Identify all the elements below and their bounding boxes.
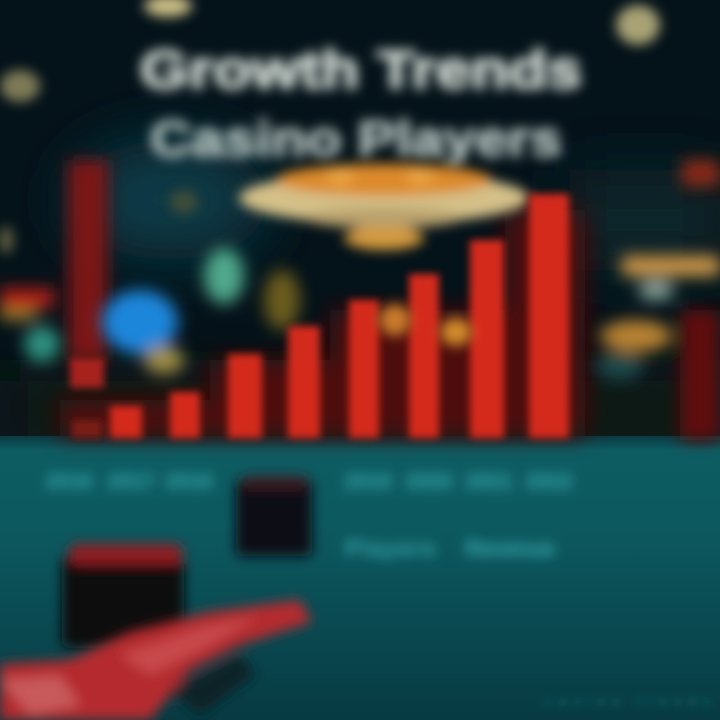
background lights [0,0,660,254]
dark dice [236,476,312,556]
dark backdrop glow [0,140,720,440]
glow between bars [379,304,472,346]
left decorative items [0,248,300,374]
axis labels: Revenue [465,536,555,561]
left tall dark red column [68,160,108,360]
right side decorations [596,160,720,440]
red cards [0,600,312,720]
footer watermark: casino trends [545,693,710,710]
axis labels: 2016 [46,471,92,493]
axis labels: 2022 [526,471,572,493]
axis labels: 2019 [345,471,391,493]
axis labels: 2017 [108,471,154,493]
axis labels: 2018 [166,471,212,493]
axis labels [46,471,572,561]
chandelier [239,164,529,250]
table surface [0,436,720,720]
title: Casino Players [150,111,562,167]
dark red shading behind bars [60,210,585,436]
stack of chips [62,544,184,648]
axis labels: 2020 [406,471,452,493]
axis labels: Players [345,536,435,561]
title [140,40,582,167]
axis labels: 2021 [466,471,512,493]
bar chart [70,194,569,438]
title: Growth Trends [140,40,582,100]
